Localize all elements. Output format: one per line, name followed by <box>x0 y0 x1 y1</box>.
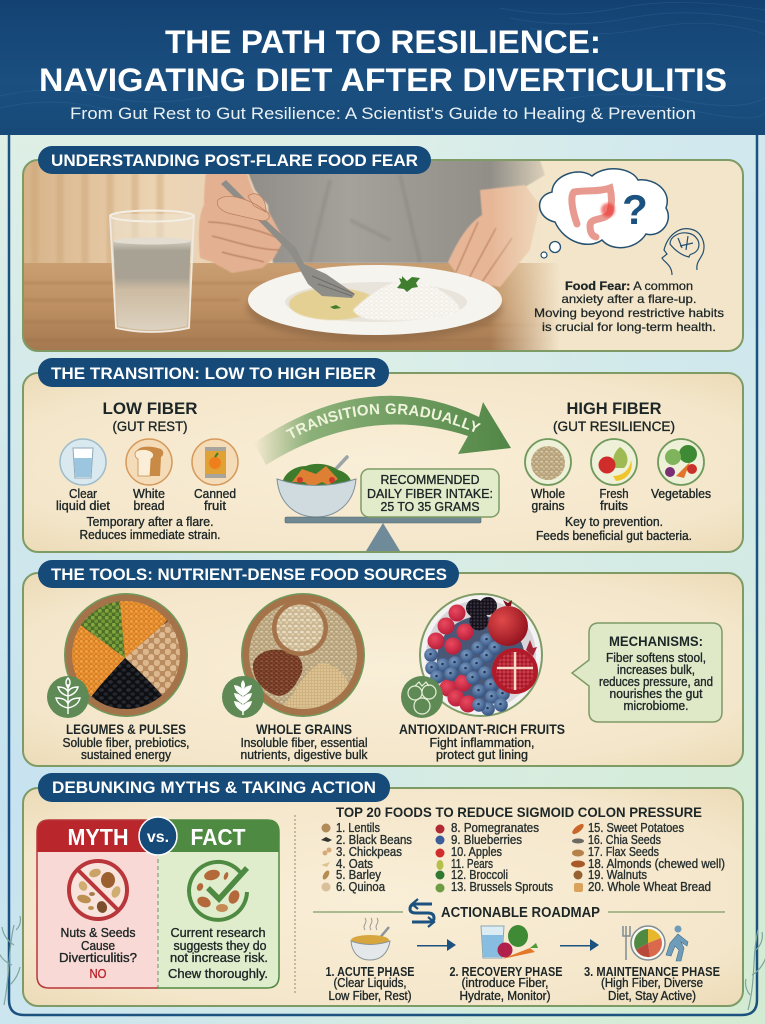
high fiber note: Key to prevention. <box>565 515 663 529</box>
left arm and hand <box>198 174 282 274</box>
high fiber note <box>536 515 692 543</box>
arrow: transition gradually <box>258 396 511 465</box>
broth <box>289 288 377 320</box>
fact text: suggests they do <box>174 939 267 953</box>
icon: water glass <box>60 439 106 485</box>
fact label: FACT <box>190 824 246 850</box>
high fiber labels: fruits <box>600 499 628 513</box>
high fiber column: (GUT RESILIENCE) <box>553 418 675 434</box>
thought cloud with colon <box>540 169 668 258</box>
text: food fear: anxiety after a flare-up. <box>562 292 696 306</box>
text: recovery phase <box>450 964 563 1003</box>
list: top 20 foods column 3: 19. Walnuts <box>588 868 647 882</box>
list: top 20 foods column 1: 6. Quinoa <box>336 880 385 894</box>
myth text: Diverticulitis? <box>59 951 137 965</box>
icon: water and vegetables <box>481 925 538 959</box>
low fiber note: Temporary after a flare. <box>86 515 214 529</box>
panel: understanding food fear <box>23 160 749 351</box>
bowl: fruits <box>401 593 543 718</box>
badge: berries <box>401 676 443 718</box>
label: legumes: Soluble fiber, prebiotics, <box>62 736 190 750</box>
icon: whole grains <box>525 439 571 485</box>
list: top 20 foods column 1: 4. Oats <box>336 857 373 871</box>
label: fruits: protect gut lining <box>436 748 528 762</box>
label: legumes: LEGUMES & PULSES <box>66 721 186 737</box>
list: top 20 foods column 3: 18. Almonds (chewed well) <box>588 857 725 871</box>
panel: transition <box>22 358 744 1007</box>
title <box>39 24 727 98</box>
icon: colon <box>572 188 615 237</box>
label: whole grains <box>240 721 368 762</box>
list: top 20 foods column 2: 13. Brussels Sprouts <box>451 880 553 894</box>
high fiber labels: Fresh <box>600 487 629 501</box>
header band <box>0 0 765 135</box>
text: recovery phase: (introduce Fiber, <box>462 976 548 990</box>
label: fruits: ANTIOXIDANT-RICH FRUITS <box>399 721 565 737</box>
heading: transition: THE TRANSITION: LOW TO HIGH FIBER <box>51 364 376 383</box>
list: top 20 foods column 1: 2. Black Beans <box>336 833 412 847</box>
label: legumes: sustained energy <box>81 748 172 762</box>
callout: mechanisms <box>572 623 722 722</box>
list: top 20 foods column 3: 17. Flax Seeds <box>588 845 659 859</box>
icon: salad bowl <box>277 457 356 517</box>
low fiber labels: Clear <box>69 487 97 501</box>
icon: soup bowl <box>351 918 390 960</box>
list: top 20 foods column 3 <box>571 821 725 894</box>
low fiber labels: bread <box>134 499 165 513</box>
hand fingers over fork <box>217 194 269 221</box>
vs badge <box>139 817 177 855</box>
text: food fear: Moving beyond restrictive habits <box>534 306 724 320</box>
callout: mechanisms: MECHANISMS: <box>609 633 703 649</box>
label: whole grains: Insoluble fiber, essential <box>240 736 368 750</box>
list: top 20 foods column 2: 10. Apples <box>451 845 502 859</box>
low fiber column: LOW FIBER <box>102 399 198 418</box>
high fiber labels: Whole <box>531 487 565 501</box>
list: top 20 foods column 1: 5. Barley <box>336 868 382 882</box>
high fiber labels: grains <box>532 499 564 513</box>
list: top 20 foods column 3: 16. Chia Seeds <box>588 833 661 847</box>
heading: debunking: DEBUNKING MYTHS & TAKING ACTION <box>52 778 376 797</box>
pomegranate whole <box>488 606 528 646</box>
low fiber labels: Canned <box>194 487 236 501</box>
arrow: recovery to maintenance <box>560 939 599 951</box>
bowl: whole grains <box>222 593 365 718</box>
list: top 20 foods column 2 <box>436 821 553 894</box>
callout: recommended daily intake <box>361 469 499 517</box>
parsley <box>397 276 420 292</box>
list: top 20 foods column 1: 3. Chickpeas <box>336 845 402 859</box>
label: whole grains: nutrients, digestive bulk <box>240 748 368 762</box>
callout: mechanisms: increases bulk, <box>617 663 695 677</box>
heading: tools: THE TOOLS: NUTRIENT-DENSE FOOD SOURCES <box>51 565 447 584</box>
scale fulcrum <box>366 523 400 551</box>
icon: fresh fruits <box>591 439 637 485</box>
callout: recommended daily intake: DAILY FIBER INTAKE: <box>367 487 493 501</box>
high fiber note: Feeds beneficial gut bacteria. <box>536 529 692 543</box>
bowl: legumes <box>47 593 188 718</box>
list: top 20 foods column 2: 11. Pears <box>451 857 493 871</box>
icon: nuts check <box>189 862 247 920</box>
text: acute phase: 1. ACUTE PHASE <box>326 964 415 979</box>
heading: understanding <box>38 146 431 174</box>
icon: plate and walker <box>623 926 688 961</box>
list: top 20 foods column 3: 20. Whole Wheat Bread <box>588 880 711 894</box>
icon: roadmap arrows <box>410 899 434 927</box>
heading: debunking <box>38 773 390 802</box>
low fiber note: Reduces immediate strain. <box>80 528 220 542</box>
fact text <box>168 926 268 981</box>
icon: nuts prohibited <box>69 861 127 919</box>
low fiber labels <box>56 487 236 513</box>
subtitle: From Gut Rest to Gut Resilience: A Scientist's Guide to Healing & Prevention <box>70 104 696 123</box>
callout: recommended daily intake: 25 TO 35 GRAMS <box>380 500 480 514</box>
myth label: MYTH <box>68 824 128 850</box>
person torso <box>243 160 545 263</box>
myth text: Nuts & Seeds <box>60 926 136 940</box>
list: top 20 foods column 2: 9. Blueberries <box>451 833 522 847</box>
callout: mechanisms: microbiome. <box>624 699 688 713</box>
scale plank <box>285 517 481 523</box>
myth text: NO <box>90 967 107 981</box>
list: top 20 foods column 3: 15. Sweet Potatoes <box>588 821 684 835</box>
vs badge: vs. <box>147 829 169 846</box>
myth text: Cause <box>81 939 115 953</box>
icon: canned fruit <box>192 439 238 485</box>
text: acute phase: (Clear Liquids, <box>334 976 406 990</box>
high fiber column <box>525 399 711 543</box>
heading: understanding: UNDERSTANDING POST-FLARE FOOD FEAR <box>51 151 418 170</box>
label: whole grains: WHOLE GRAINS <box>256 721 352 737</box>
text: recovery phase: 2. RECOVERY PHASE <box>450 964 563 979</box>
fact text: Chew thoroughly. <box>168 967 268 981</box>
text: food fear <box>534 279 724 334</box>
high fiber column: HIGH FIBER <box>566 399 662 418</box>
label: fruits: Fight inflammation, <box>430 736 534 750</box>
icon: question mark: ? <box>622 186 648 233</box>
photo: meal at table <box>23 160 749 351</box>
raspberries <box>448 604 466 622</box>
heading: top 20 foods: TOP 20 FOODS TO REDUCE SIGMOID COLON PRESSURE <box>336 804 702 820</box>
label: legumes <box>62 721 190 762</box>
text: maintenance phase <box>584 964 720 1003</box>
label: fruits <box>399 721 565 762</box>
title: NAVIGATING DIET AFTER DIVERTICULITIS <box>39 62 727 98</box>
plate <box>246 302 504 342</box>
blackberries <box>466 599 484 617</box>
arrow: acute to recovery <box>417 939 456 951</box>
title: THE PATH TO RESILIENCE: <box>165 24 601 60</box>
list: top 20 foods column 1 <box>321 821 412 894</box>
callout: mechanisms: Fiber softens stool, <box>606 651 706 665</box>
high fiber labels <box>531 487 711 513</box>
glass of water <box>110 210 194 332</box>
list: top 20 foods column 1: 1. Lentils <box>336 821 380 835</box>
badge: sprig <box>47 676 89 718</box>
text: food fear: Food Fear: A common <box>565 279 693 293</box>
low fiber labels: liquid diet <box>56 499 111 513</box>
text: acute phase <box>326 964 415 1003</box>
text: acute phase: Low Fiber, Rest) <box>328 989 412 1003</box>
heading: actionable roadmap: ACTIONABLE ROADMAP <box>441 905 600 921</box>
icon: head with brain <box>662 229 704 275</box>
callout: recommended daily intake: RECOMMENDED <box>380 473 480 487</box>
high fiber labels: Vegetables <box>651 487 711 501</box>
text: maintenance phase: (High Fiber, Diverse <box>601 976 703 990</box>
fact text: not increase risk. <box>170 951 268 965</box>
right arm and hand <box>448 185 540 287</box>
icon: vegetables <box>658 439 704 485</box>
badge: wheat <box>222 676 264 718</box>
text: recovery phase: Hydrate, Monitor) <box>460 989 550 1003</box>
text: maintenance phase: Diet, Stay Active) <box>608 989 696 1003</box>
rice <box>353 280 460 321</box>
heading: transition <box>38 358 389 387</box>
low fiber column <box>56 399 238 542</box>
pomegranate half <box>492 648 538 694</box>
list: top 20 foods column 2: 8. Pomegranates <box>451 821 539 835</box>
fork <box>221 180 355 298</box>
arrow: transition gradually: TRANSITION GRADUALLY <box>286 403 481 438</box>
panel: tools <box>23 573 743 766</box>
callout: mechanisms: nourishes the gut <box>610 687 703 701</box>
myth vs fact card <box>37 817 279 988</box>
text: food fear: is crucial for long-term health. <box>542 320 716 334</box>
fact text: Current research <box>170 926 266 940</box>
myth text <box>59 926 137 981</box>
text: maintenance phase: 3. MAINTENANCE PHASE <box>584 964 720 979</box>
low fiber labels: fruit <box>204 499 227 513</box>
blueberries <box>424 648 438 662</box>
icon: white bread <box>126 439 172 485</box>
heading: tools <box>38 560 459 588</box>
low fiber labels: White <box>133 487 165 501</box>
callout: mechanisms: reduces pressure, and <box>599 675 713 689</box>
low fiber note <box>80 515 220 542</box>
low fiber column: (GUT REST) <box>112 418 188 434</box>
list: top 20 foods column 2: 12. Broccoli <box>451 868 508 882</box>
panel: myths and action <box>23 788 743 1006</box>
